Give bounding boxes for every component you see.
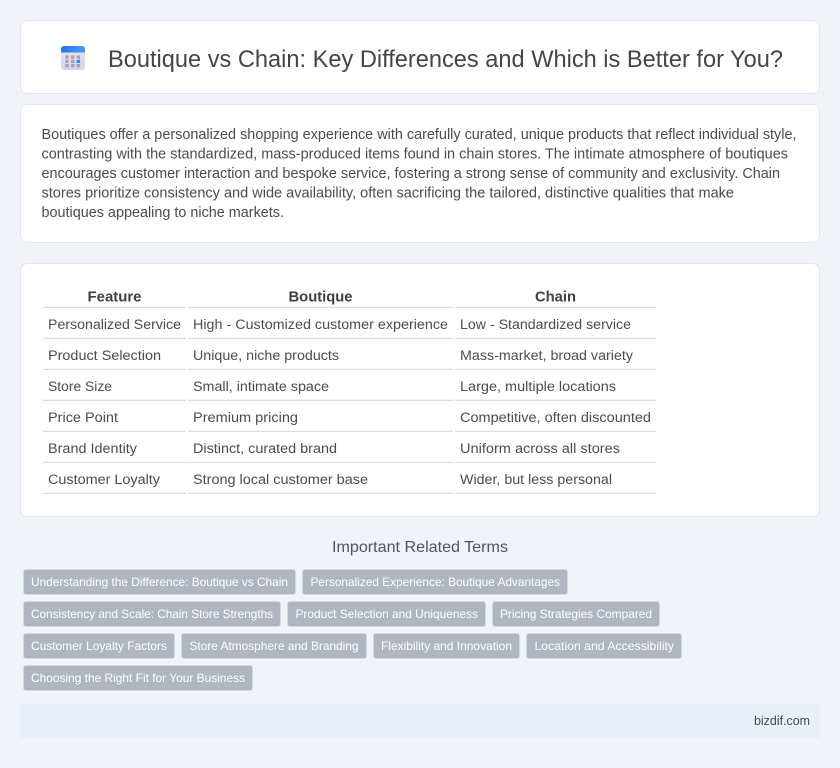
heading: important related terms: Important Related Terms [332, 539, 508, 556]
row: store size: Small, intimate space [193, 379, 329, 395]
tag: Choosing the Right Fit for Your Business [31, 671, 245, 685]
row: customer loyalty: Customer Loyalty [48, 472, 161, 488]
row: customer loyalty: Wider, but less personal [460, 472, 612, 488]
tag: Understanding the Difference: Boutique vs Chain [31, 575, 288, 589]
intro paragraph: boutiques appealing to niche markets. [42, 205, 284, 221]
row: store size [48, 379, 616, 395]
intro paragraph: Boutiques offer a personalized shopping experience with carefully curated, unique products that reflect individual style, [42, 127, 796, 143]
panel: introduction text [20, 104, 820, 242]
icon: calendar [61, 46, 85, 70]
row: product selection: Mass-market, broad variety [460, 348, 634, 364]
row: brand identity [48, 441, 620, 457]
row: store size: Large, multiple locations [460, 379, 616, 395]
intro paragraph: encourages customer interaction and bespoke service, fostering a strong sense of community and exclusivity. Chain [42, 166, 780, 182]
panel: related term tags [24, 570, 682, 690]
row: brand identity: Brand Identity [48, 441, 138, 457]
tag: Flexibility and Innovation [381, 639, 512, 653]
row: price point: Competitive, often discounted [460, 410, 651, 426]
row: customer loyalty [48, 472, 612, 488]
row: brand identity: Uniform across all stores [460, 441, 620, 457]
intro paragraph [42, 127, 796, 221]
row: price point: Premium pricing [193, 410, 298, 426]
row: product selection: Product Selection [48, 348, 161, 364]
row: product selection [48, 348, 634, 364]
footer [20, 704, 820, 738]
intro paragraph: contrasting with the standardized, mass-produced items found in chain stores. The intimate atmosphere of boutiques [42, 146, 788, 162]
row: personalized service [48, 317, 631, 333]
row: personalized service: Personalized Service [48, 317, 181, 333]
tag [526, 634, 682, 658]
row: personalized service: Low - Standardized service [460, 317, 631, 333]
table header: Feature [88, 288, 142, 306]
tag: Product Selection and Uniqueness [296, 607, 478, 621]
tag [492, 602, 660, 626]
title: Boutique vs Chain: Key Differences and Which is Better for You? [108, 46, 783, 73]
row: store size: Store Size [48, 379, 112, 395]
tag [374, 634, 520, 658]
panel: title header [20, 20, 820, 94]
table header: Chain [535, 288, 576, 306]
tag [24, 602, 280, 626]
intro paragraph: stores prioritize consistency and wide availability, often sacrificing the tailored, distinctive qualities that make [42, 186, 734, 202]
tag [24, 570, 296, 594]
tag [288, 602, 486, 626]
tag: Pricing Strategies Compared [500, 607, 652, 621]
row: price point [48, 410, 651, 426]
tag: Consistency and Scale: Chain Store Strengths [31, 607, 273, 621]
row: personalized service: High - Customized customer experience [193, 317, 448, 333]
table header [88, 288, 576, 306]
row: customer loyalty: Strong local customer base [193, 472, 368, 488]
tag: Personalized Experience: Boutique Advantages [310, 575, 560, 589]
tag [302, 570, 568, 594]
row: product selection: Unique, niche products [193, 348, 339, 364]
footer source: bizdif.com [754, 714, 810, 728]
tag: Customer Loyalty Factors [31, 639, 167, 653]
tag: Store Atmosphere and Branding [190, 639, 358, 653]
tag [182, 634, 366, 658]
row: brand identity: Distinct, curated brand [193, 441, 337, 457]
table header: Boutique [288, 288, 352, 306]
row: price point: Price Point [48, 410, 118, 426]
panel: comparison table [20, 264, 820, 516]
tag [24, 666, 252, 690]
tag [24, 634, 174, 658]
tag: Location and Accessibility [534, 639, 674, 653]
